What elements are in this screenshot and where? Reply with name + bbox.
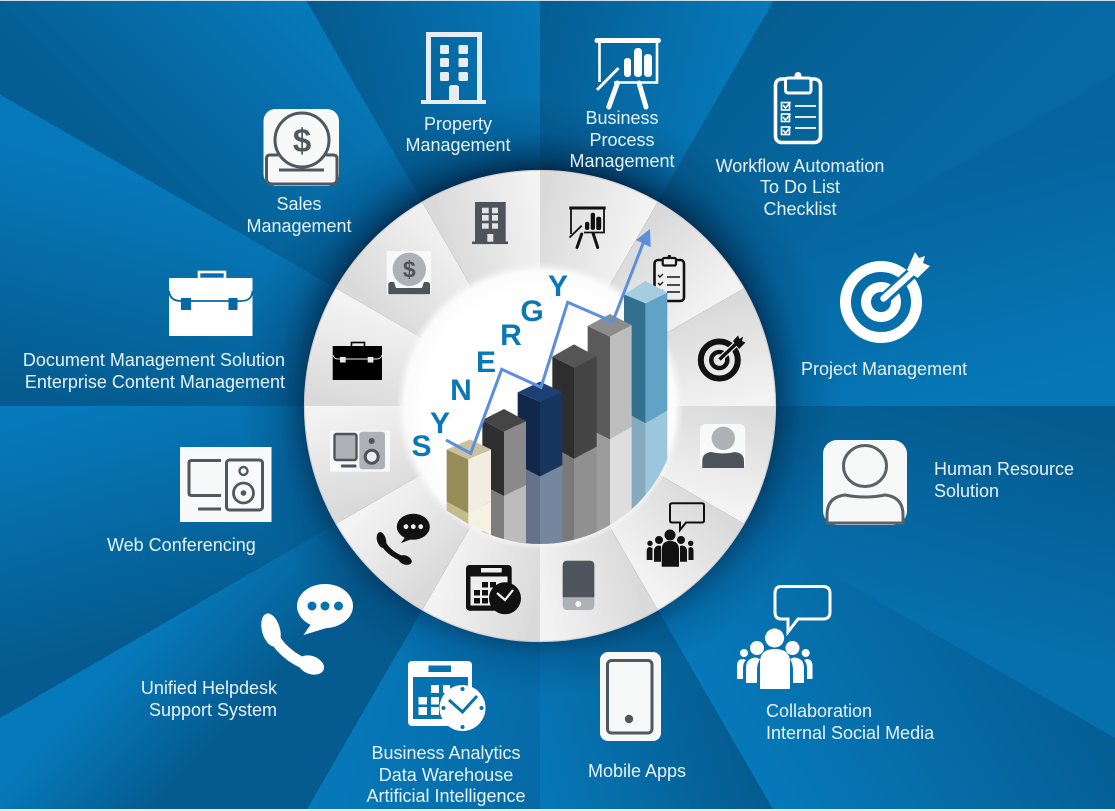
bar: charcoal [552, 344, 597, 547]
icon: monitor and speaker tile [180, 447, 272, 522]
small icon: monitor and speaker tile [330, 431, 390, 472]
label: Sales [276, 194, 322, 214]
bar: dark grey [482, 409, 526, 547]
small icon: building [472, 202, 508, 244]
heading: SYNERGY letters [411, 270, 568, 463]
heading: SYNERGY letters: E [476, 346, 496, 379]
small icon: team with speech bubble [647, 503, 704, 567]
small icon: checklist clipboard [654, 255, 684, 301]
icon: presentation easel [597, 40, 658, 107]
small icon: target with arrow [701, 336, 746, 378]
label: Management [405, 135, 511, 155]
icon: coin tray tile: $ [293, 122, 311, 159]
label: Project Management [801, 359, 967, 379]
label: Enterprise Content Management [25, 372, 285, 392]
icon: phone tile [600, 652, 661, 741]
label: Business Analytics [371, 743, 521, 763]
item: Sales Management [246, 109, 352, 236]
item: Human Resource Solution [823, 440, 1074, 525]
bar: navy [518, 382, 562, 547]
heading: SYNERGY letters: R [500, 319, 522, 352]
label: Support System [149, 700, 277, 720]
icon: person tile [823, 440, 907, 525]
small icon: person tile [700, 424, 745, 468]
label: Internal Social Media [766, 723, 935, 743]
small icon: presentation easel [569, 208, 606, 248]
icon: team with speech bubble [737, 586, 830, 689]
item: Mobile Apps [588, 652, 686, 781]
heading: SYNERGY letters: Y [430, 407, 450, 440]
item: Business Process Management [569, 40, 675, 171]
icon: phone and chat bubble [258, 584, 353, 678]
bar: light grey [588, 314, 632, 547]
small icon: coin tray tile [387, 251, 431, 295]
icon: calendar with clock [408, 661, 486, 731]
label: Web Conferencing [107, 535, 256, 555]
small icon: mobile device [563, 561, 594, 610]
item: Web Conferencing [107, 447, 272, 555]
small icon: briefcase [333, 342, 382, 380]
label: Document Management Solution [23, 350, 285, 370]
heading: SYNERGY letters: Y [548, 270, 568, 303]
label: Collaboration [766, 701, 872, 721]
item: Collaboration [737, 586, 935, 743]
small icon: phone with chat bubble [375, 514, 430, 567]
small icon: coin tray tile: $ [403, 256, 416, 282]
label: Unified Helpdesk [141, 678, 278, 698]
label: Process [589, 130, 655, 150]
label: Property [424, 114, 492, 134]
item: Workflow Automation [716, 72, 884, 219]
rising trend arrow [446, 229, 651, 453]
label: Workflow Automation [716, 156, 884, 176]
label: Artificial Intelligence [366, 786, 526, 806]
item: Unified Helpdesk [141, 584, 353, 720]
3D bar chart [447, 281, 667, 547]
bar: tan [447, 439, 491, 535]
label: To Do List [760, 177, 840, 197]
label: Management [246, 216, 352, 236]
heading: SYNERGY letters: S [411, 430, 432, 463]
small icon: calendar with clock [466, 565, 521, 614]
label: Data Warehouse [379, 765, 513, 785]
label: Human Resource [934, 459, 1074, 479]
item: Project Management [801, 252, 967, 379]
label: Solution [934, 481, 999, 501]
label: Business [585, 108, 659, 128]
item: Business Analytics [366, 661, 526, 806]
icon: building outline [421, 32, 486, 104]
panel: grey segmented wheel [304, 170, 776, 642]
label: Mobile Apps [588, 761, 686, 781]
icon: briefcase [169, 272, 252, 336]
icon: clipboard checklist [776, 72, 820, 142]
icon: target with arrow [846, 252, 930, 338]
heading: SYNERGY letters: N [450, 374, 472, 407]
heading: SYNERGY letters: G [520, 295, 544, 328]
label: Management [569, 151, 675, 171]
white inner circle [396, 262, 684, 550]
bar: light blue [624, 281, 668, 516]
label: Checklist [763, 199, 837, 219]
item: Document Management [23, 272, 285, 392]
item: Property Management [405, 32, 511, 155]
wheel drop shadow [240, 96, 840, 696]
